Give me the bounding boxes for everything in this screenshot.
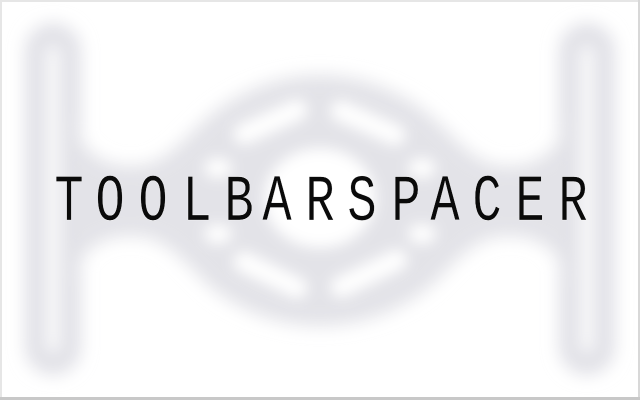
title: TOOLBARSPACER: B xyxy=(224,167,254,240)
blurred starfighter silhouette xyxy=(36,34,604,364)
right wing xyxy=(570,34,604,364)
title: TOOLBARSPACER: C xyxy=(472,167,502,240)
left wing xyxy=(36,34,70,364)
title: TOOLBARSPACER: R xyxy=(305,167,335,240)
fuselage body xyxy=(70,75,570,326)
title: TOOLBARSPACER: T xyxy=(54,167,84,240)
lower right port xyxy=(341,260,397,287)
title: TOOLBARSPACER: E xyxy=(515,167,545,240)
title: TOOLBARSPACER: R xyxy=(558,167,588,240)
title: TOOLBARSPACER: O xyxy=(138,167,168,240)
central cockpit opening xyxy=(264,148,376,248)
title: TOOLBARSPACER: A xyxy=(262,167,292,240)
title: TOOLBARSPACER: L xyxy=(182,167,212,240)
side highlights xyxy=(204,158,436,244)
title: TOOLBARSPACER xyxy=(54,167,588,240)
title: TOOLBARSPACER: O xyxy=(95,167,125,240)
title: TOOLBARSPACER: P xyxy=(391,167,421,240)
title: TOOLBARSPACER: A xyxy=(430,167,460,240)
title: TOOLBARSPACER: S xyxy=(347,167,377,240)
lower left port xyxy=(244,262,297,288)
upper right port xyxy=(341,111,395,135)
upper left port xyxy=(244,110,297,134)
